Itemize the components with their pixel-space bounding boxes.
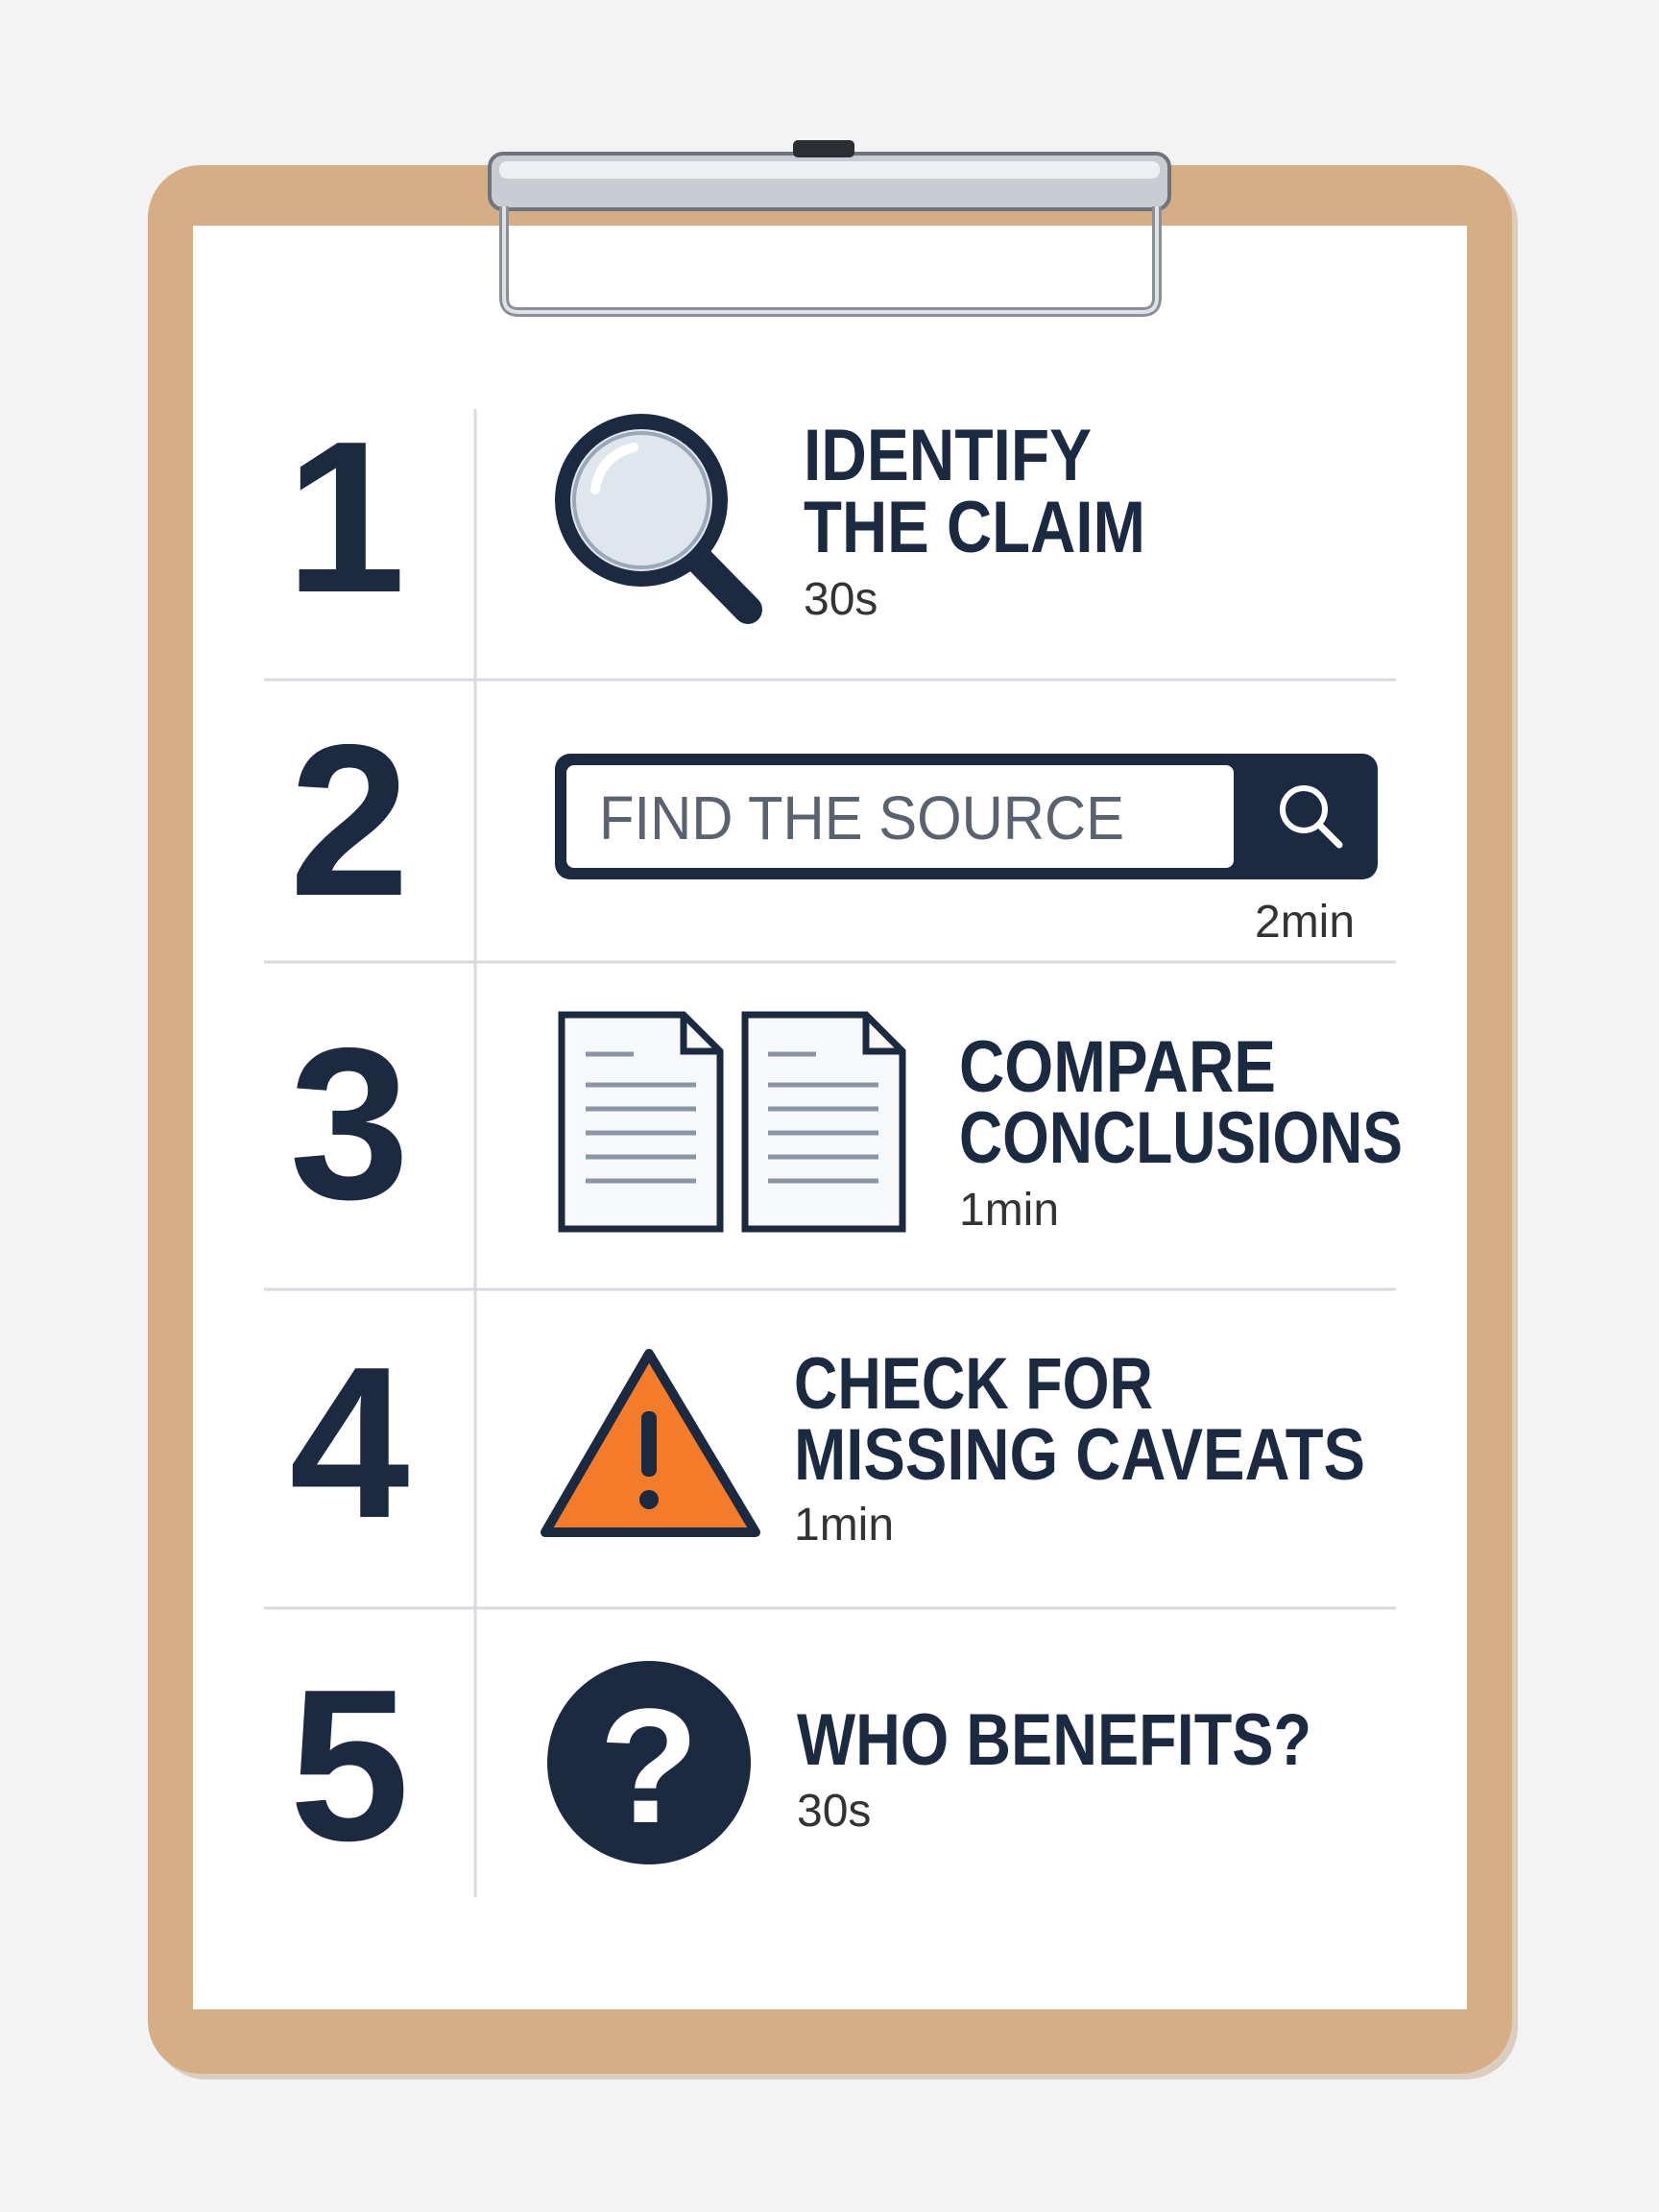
- step numbers: 2: [289, 699, 410, 941]
- step 4 text: CHECK FOR: [794, 1343, 1153, 1425]
- step 2: search bar: [555, 754, 1378, 879]
- step 3: documents icon: [562, 1015, 902, 1229]
- step 4 text: 1min: [794, 1500, 894, 1551]
- step 3 text: [959, 1026, 1403, 1236]
- step numbers: 3: [289, 1002, 410, 1244]
- step 1: magnifier icon: [563, 421, 748, 610]
- step numbers: 4: [289, 1321, 410, 1563]
- step 1 text: 30s: [804, 574, 878, 625]
- step 2 time: 2min: [1255, 897, 1355, 948]
- step numbers: 5: [289, 1644, 410, 1886]
- step 5 text: 30s: [797, 1786, 871, 1837]
- step 1 text: THE CLAIM: [804, 487, 1145, 568]
- step 4 text: [794, 1343, 1365, 1551]
- step 3 text: COMPARE: [959, 1026, 1276, 1108]
- step 3 text: CONCLUSIONS: [959, 1097, 1403, 1179]
- step 3 text: 1min: [959, 1185, 1059, 1236]
- step numbers: 1: [285, 396, 406, 637]
- paper sheet: [193, 226, 1467, 2009]
- metal clip: [490, 140, 1169, 312]
- step 5: question icon: ?: [599, 1675, 699, 1858]
- step 1 text: [804, 415, 1145, 625]
- step 5: question icon: [547, 1661, 751, 1864]
- step numbers: [285, 396, 410, 1886]
- step 2: search bar: FIND THE SOURCE: [599, 783, 1124, 853]
- vertical divider: [474, 409, 476, 1897]
- step 4 text: MISSING CAVEATS: [794, 1414, 1365, 1496]
- step 5 text: WHO BENEFITS?: [797, 1699, 1311, 1781]
- step 1 text: IDENTIFY: [804, 415, 1092, 496]
- clipboard board: [148, 165, 1518, 2080]
- step 4: warning icon: [545, 1354, 756, 1532]
- step 5 text: [797, 1699, 1311, 1837]
